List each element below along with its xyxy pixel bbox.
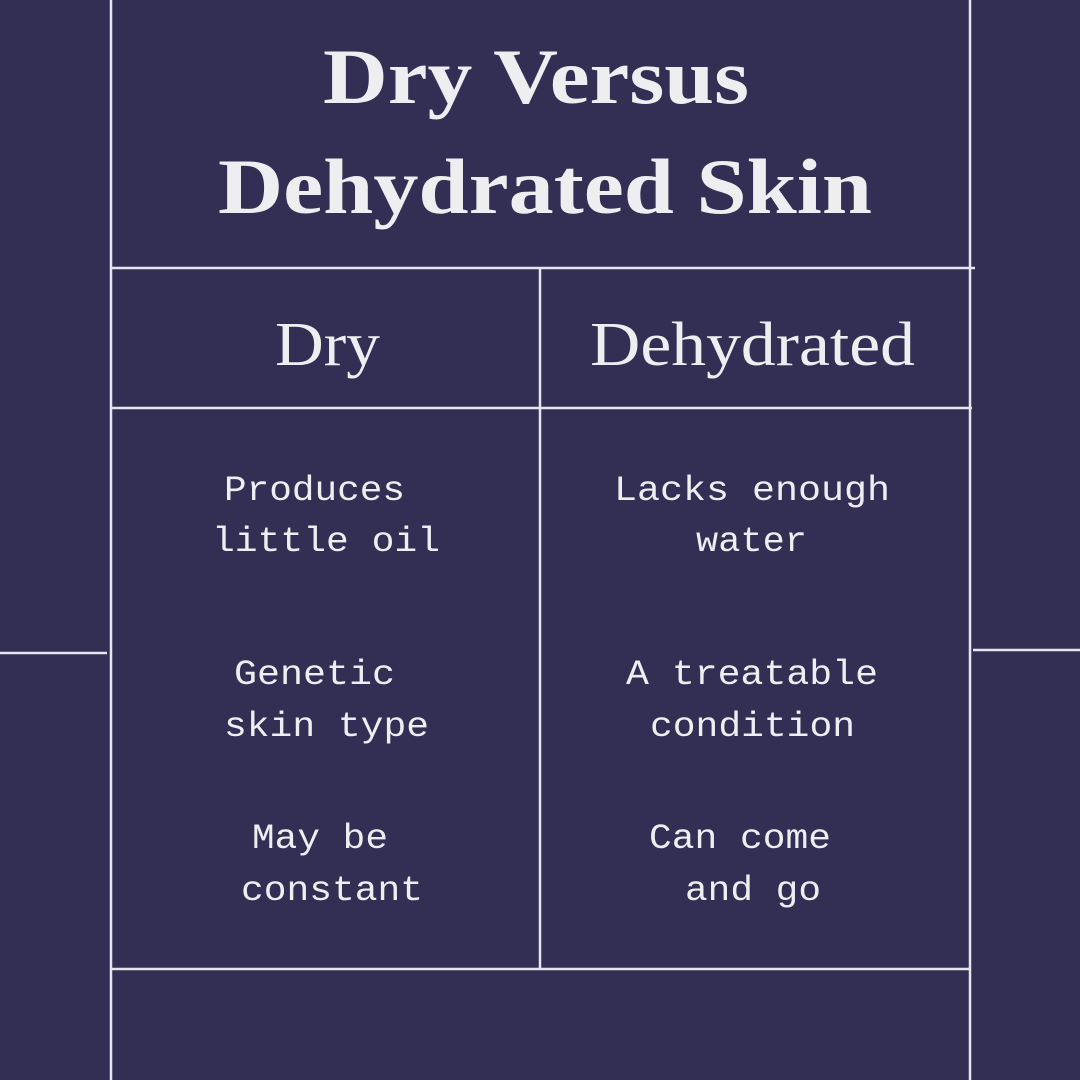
comparison rows: and go bbox=[685, 871, 821, 911]
column headers bbox=[275, 311, 915, 379]
comparison rows: A treatable bbox=[626, 655, 878, 695]
comparison rows: Genetic bbox=[234, 655, 395, 695]
comparison rows: Lacks enough bbox=[614, 471, 890, 511]
comparison rows: Can come bbox=[649, 819, 831, 859]
title bbox=[218, 33, 872, 230]
comparison rows: skin type bbox=[224, 707, 429, 747]
column headers: Dry bbox=[275, 311, 380, 379]
column headers: Dehydrated bbox=[590, 311, 915, 379]
comparison rows: Produces bbox=[224, 471, 405, 511]
comparison rows: water bbox=[696, 522, 807, 562]
comparison rows: constant bbox=[241, 871, 423, 911]
comparison rows bbox=[212, 471, 890, 911]
comparison rows: condition bbox=[650, 707, 855, 747]
comparison rows: little oil bbox=[212, 522, 440, 562]
title: Dry Versus bbox=[323, 33, 749, 120]
title: Dehydrated Skin bbox=[218, 143, 872, 230]
comparison rows: May be bbox=[252, 819, 388, 859]
